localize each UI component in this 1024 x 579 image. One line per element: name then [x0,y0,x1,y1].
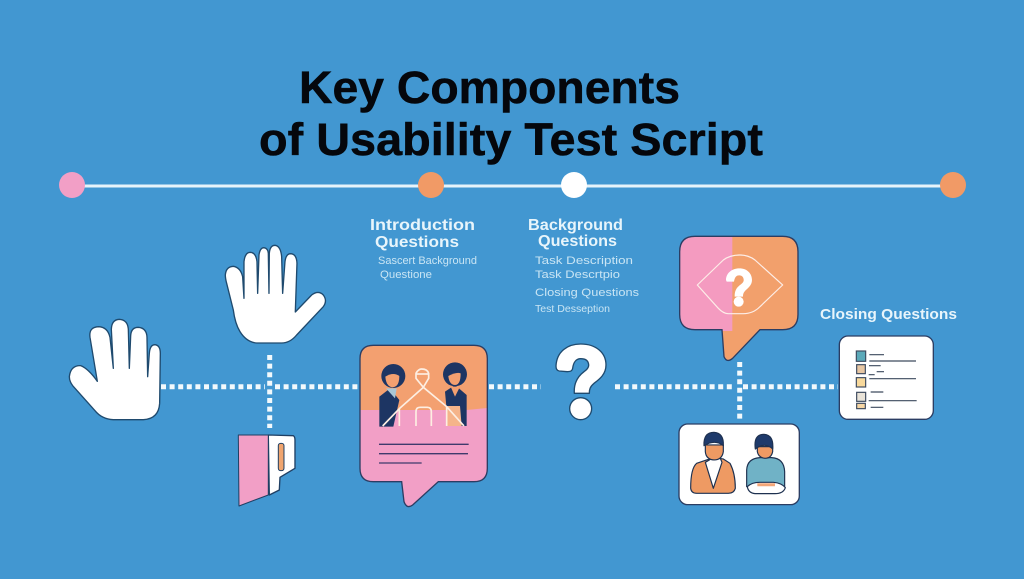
checklist boxes [856,351,866,409]
title: of Usability Test Script [259,114,763,165]
text block: background questions: Questions [538,233,617,250]
icon: question mark [556,344,606,420]
checklist lines [869,355,917,407]
text block: background questions: Closing Questions [535,287,640,299]
icon: folded card [238,435,295,506]
text block: background questions [528,217,640,315]
title: Key Components [299,62,680,113]
panel: introduction speech bubble [360,345,487,507]
text block: background questions: Test Desseption [535,304,610,315]
dotted connectors [161,355,838,428]
icon: facilitator [691,432,735,493]
text block: background questions: Task Descrtpio [535,269,620,281]
icon: left hand [69,319,160,420]
text block: background questions: Background [528,217,623,234]
text block: introduction questions: Introduction [370,217,475,234]
panel: checklist card [839,336,933,419]
label: closing questions: Closing Questions [820,306,957,323]
text block: introduction questions: Sascert Background [378,255,477,267]
icon: eye outline [697,255,783,314]
icon: participant [747,434,785,494]
icon: right person [443,362,467,426]
icon: house outline [383,369,464,426]
panel: participants card [679,424,799,505]
title [259,62,763,165]
icon: white question mark [726,268,752,307]
text block: background questions: Task Description [535,255,633,267]
text lines [379,444,469,463]
timeline [59,172,966,198]
text block: introduction questions [370,217,477,281]
text block: introduction questions: Questione [380,269,432,281]
text block: introduction questions: Questions [375,234,459,251]
icon: raised hand [225,245,325,343]
icon: left person [379,364,405,427]
panel: question speech bubble [680,236,798,360]
